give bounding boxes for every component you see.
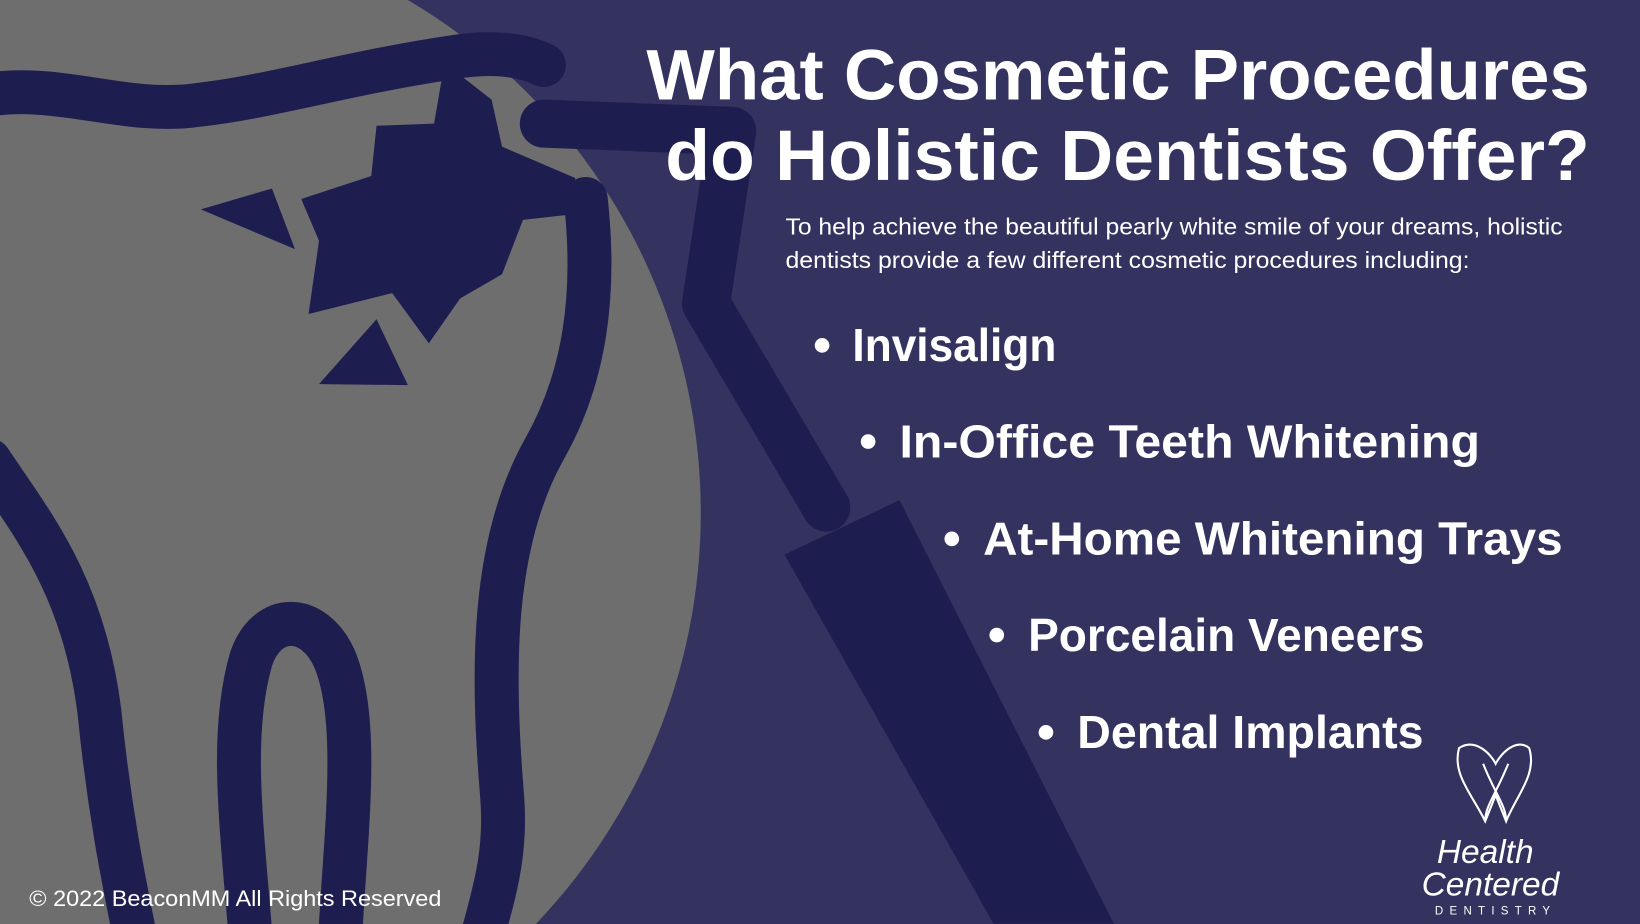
list of procedures: In-Office Teeth Whitening — [899, 415, 1480, 467]
logo: Centered — [1422, 867, 1561, 904]
title: What Cosmetic Procedures — [646, 37, 1590, 116]
icon: dental probe — [544, 124, 1114, 924]
copyright: © 2022 BeaconMM All Rights Reserved — [29, 886, 441, 911]
logo: Health — [1437, 834, 1534, 871]
gray circle background — [0, 0, 701, 924]
list of procedures — [815, 319, 1563, 758]
list of procedures: Dental Implants — [1077, 706, 1423, 758]
logo — [1422, 745, 1561, 917]
list of procedures: At-Home Whitening Trays — [983, 513, 1563, 565]
list of procedures: Porcelain Veneers — [1028, 609, 1425, 661]
intro paragraph — [785, 214, 1563, 273]
list of procedures: Invisalign — [852, 319, 1056, 371]
title: do Holistic Dentists Offer? — [665, 117, 1590, 196]
icon: tooth crack — [201, 63, 575, 385]
intro paragraph: dentists provide a few different cosmetic procedures including: — [785, 247, 1470, 273]
icon: tooth outline — [0, 54, 589, 924]
logo: DENTISTRY — [1435, 905, 1556, 917]
title — [646, 37, 1590, 196]
intro paragraph: To help achieve the beautiful pearly white smile of your dreams, holistic — [785, 214, 1563, 240]
